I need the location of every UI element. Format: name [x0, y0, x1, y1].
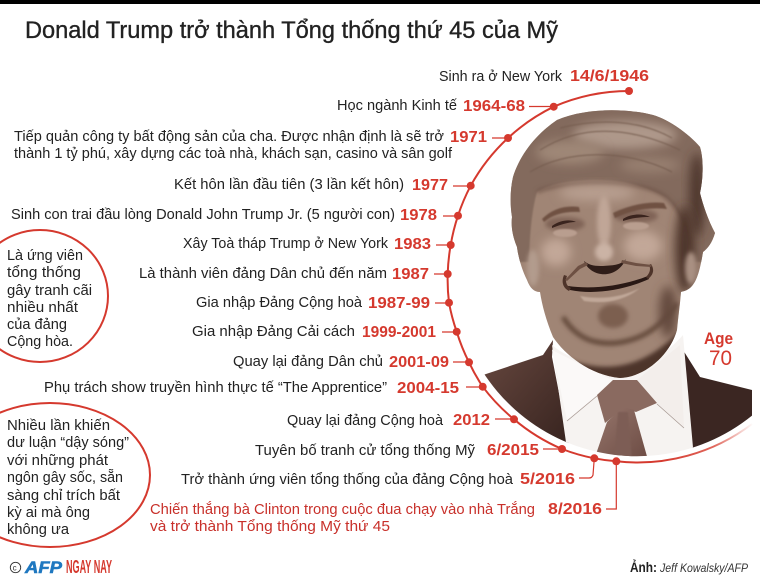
timeline entry: 8/2016: 8/2016 [548, 501, 602, 518]
timeline entry: 1971 [14, 128, 487, 162]
timeline entry: 5/2016: 5/2016 [520, 471, 575, 488]
callout: shocking statements: dư luận “dậy sóng” [7, 434, 129, 451]
callout: shocking statements: ngôn gây sốc, sẵn [7, 469, 123, 486]
face shadows [675, 206, 695, 294]
timeline entry: 1978: Sinh con trai đầu lòng Donald John Trump Jr. (5 người con) [11, 206, 395, 223]
age label: Age [704, 329, 733, 348]
logo: AFP Ngày Nay: NGAY NAY [66, 557, 112, 577]
hair [510, 110, 715, 262]
timeline entry: 1999-2001 [192, 323, 436, 341]
timeline entry: 1971: 1971 [450, 129, 487, 146]
timeline entry: 2004-15: 2004-15 [397, 380, 459, 397]
callout: most controversial candidate: Cộng hòa. [7, 333, 73, 350]
face highlights [559, 185, 635, 201]
callout: most controversial candidate [0, 230, 108, 362]
timeline entry: 1971: thành 1 tỷ phú, xây dựng các toà nhà, khách sạn, casino và sân golf [14, 145, 453, 162]
timeline entry: 1946: 14/6/1946 [570, 68, 649, 85]
callout: most controversial candidate: Là ứng viên [7, 247, 83, 264]
timeline arc fading end [616, 424, 752, 462]
timeline entry: 1946 [439, 68, 649, 85]
smile creases and mouth [563, 260, 653, 302]
logo: AFP Ngày Nay: c [13, 563, 17, 572]
callout: most controversial candidate: nhiều nhất [7, 299, 79, 316]
timeline entry: 2004-15: Phụ trách show truyền hình thực tế “The Apprentice” [44, 379, 387, 396]
callout: shocking statements: kỳ ai mà ông [7, 504, 90, 521]
title: Donald Trump trở thành Tổng thống thứ 45 của Mỹ [25, 17, 558, 44]
timeline entry: 6/2015: 6/2015 [487, 442, 539, 459]
photo credit: Ảnh: [630, 559, 657, 575]
timeline entry: 1971: Tiếp quản công ty bất động sản của cha. Được nhận định là sẽ trở [14, 128, 444, 145]
tie [594, 380, 657, 460]
callout: shocking statements: không ưa [7, 521, 70, 538]
timeline entry: 2012: 2012 [453, 412, 490, 429]
callout: shocking statements: sàng chỉ trích bất [7, 487, 121, 504]
nose [584, 243, 626, 274]
connector lines [434, 106, 616, 509]
timeline entry: 2001-09: Quay lại đảng Dân chủ [233, 353, 383, 370]
photo credit: Jeff Kowalsky/AFP [659, 561, 748, 575]
callout: most controversial candidate: của đảng [7, 316, 67, 333]
callout: shocking statements: Nhiều lần khiến [7, 417, 110, 434]
timeline entry: 1987-99: 1987-99 [368, 295, 430, 312]
timeline entry: 1983: Xây Toà tháp Trump ở New York [183, 235, 388, 252]
photo credit [630, 559, 748, 575]
timeline entry: 1946: Sinh ra ở New York [439, 68, 562, 85]
timeline entry: 1987: 1987 [392, 266, 429, 283]
eye sockets [545, 217, 585, 231]
callout: most controversial candidate: tổng thống [7, 264, 81, 281]
timeline entry: 1983: 1983 [394, 236, 431, 253]
timeline entry: 8/2016: và trở thành Tổng thống Mỹ thứ 45 [150, 518, 390, 535]
timeline entry: 1978: 1978 [400, 207, 437, 224]
shirt and collar [552, 336, 693, 456]
timeline entry: 8/2016: Chiến thắng bà Clinton trong cuộc đua chạy vào nhà Trắng [150, 501, 535, 518]
timeline entry: 6/2015: Tuyên bố tranh cử tổng thống Mỹ [255, 442, 475, 459]
timeline entry: 1999-2001: 1999-2001 [362, 324, 436, 341]
timeline arc [448, 91, 629, 461]
callout: most controversial candidate: gây tranh cãi [7, 282, 92, 299]
callout: shocking statements: với những phát [7, 452, 109, 469]
logo: AFP Ngày Nay: AFP [24, 558, 63, 577]
timeline entry: 2012: Quay lại đảng Cộng hoà [287, 412, 444, 429]
jacket [484, 340, 752, 448]
timeline dots [444, 87, 633, 465]
age label [704, 329, 733, 370]
timeline entry: 1999-2001: Gia nhập Đảng Cải cách [192, 323, 355, 340]
timeline entry: 2001-09 [233, 353, 449, 371]
timeline entry: 1987: Là thành viên đảng Dân chủ đến năm [139, 265, 387, 282]
logo: AFP Ngày Nay [10, 557, 112, 577]
top black bar [0, 0, 760, 4]
head and face [510, 110, 715, 378]
age label: 70 [709, 347, 732, 370]
callout: shocking statements [0, 403, 150, 547]
timeline entry: 2001-09: 2001-09 [389, 354, 449, 371]
timeline entry: 8/2016 [150, 501, 602, 535]
eyes and brows [542, 202, 667, 237]
timeline entry: 1964-68: 1964-68 [463, 98, 525, 115]
portrait photo of Donald Trump [484, 110, 752, 456]
timeline entry: 1987-99: Gia nhập Đảng Cộng hoà [196, 294, 363, 311]
timeline entry: 1964-68 [337, 97, 525, 115]
timeline entry: 1977: 1977 [412, 177, 448, 194]
timeline entry: 1977: Kết hôn lần đầu tiên (3 lần kết hôn) [174, 176, 404, 193]
timeline entry: 1964-68: Học ngành Kinh tế [337, 97, 458, 114]
timeline entry: 5/2016: Trở thành ứng viên tổng thống của đảng Cộng hoà [181, 471, 514, 488]
timeline entry: 1987-99 [196, 294, 430, 312]
